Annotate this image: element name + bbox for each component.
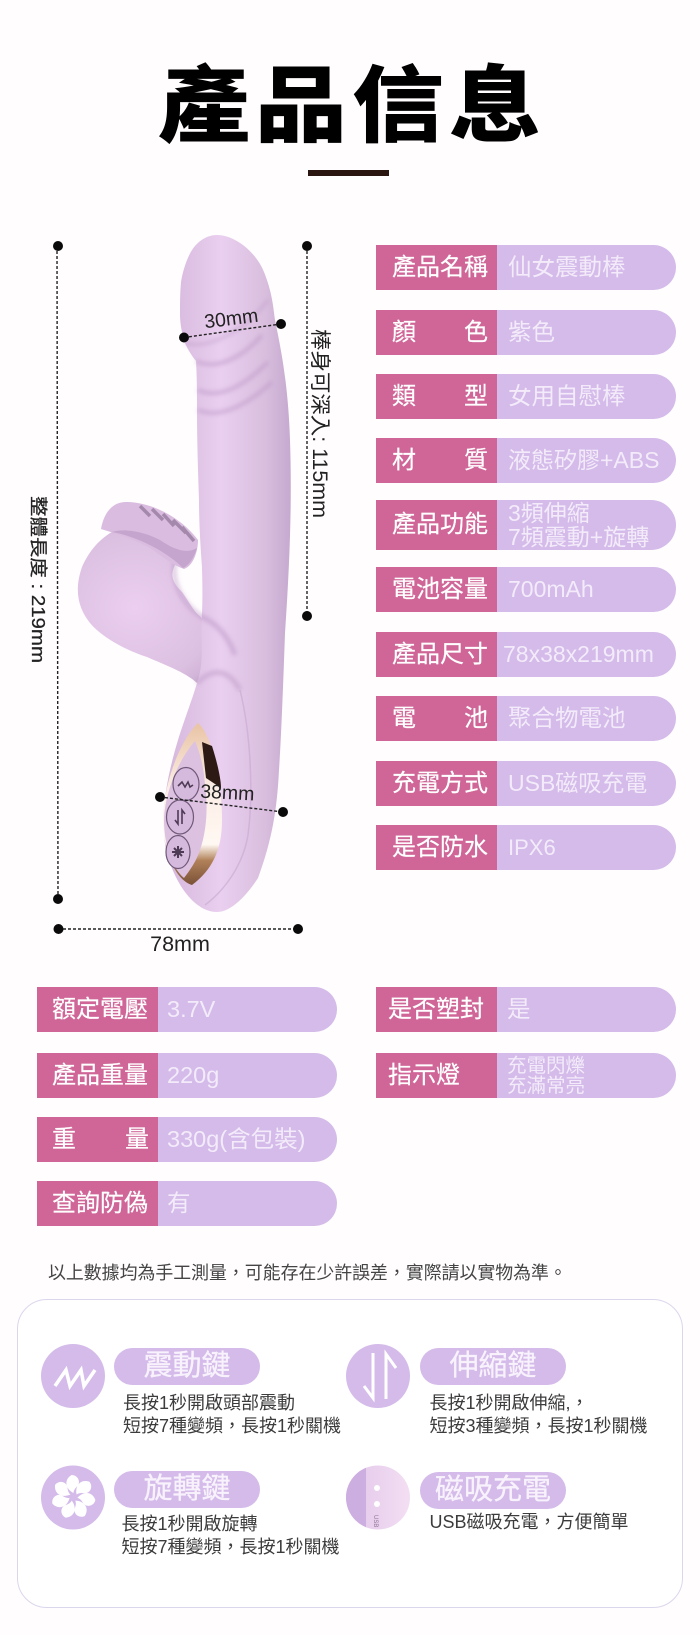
spec row: 產品重量: 220g: [167, 1062, 219, 1088]
icon: magnetic charging: USB: [372, 1515, 378, 1527]
spec row: 電池容量: 電池容量: [392, 576, 488, 602]
spec row: 類型: 女用自慰棒: [508, 383, 626, 409]
text: 伸縮鍵 description: 長按1秒開啟伸縮,，: [430, 1393, 589, 1413]
spec row: 顏色: 紫色: [508, 319, 555, 345]
spec row: 產品功能: [376, 500, 676, 550]
dimension: insertable length: [302, 241, 331, 621]
spec row: 產品尺寸: 產品尺寸: [392, 640, 488, 668]
spec row: 額定電壓: [37, 987, 337, 1032]
dimension: width 78mm: 78mm: [150, 932, 210, 956]
spec row: 電池: 聚合物電池: [508, 705, 626, 731]
spec row: 重量: 重: [52, 1126, 76, 1152]
spec row: 是否防水: 是否防水: [392, 834, 488, 860]
spec row: 產品名稱: 產品名稱: [392, 254, 488, 280]
spec row: 產品功能: 3頻伸縮: [508, 500, 590, 526]
dimension: insertable length: 棒身可深入: 115mm: [308, 329, 331, 518]
disclaimer note: 以上數據均為手工測量，可能存在少許誤差，實際請以實物為準。: [48, 1263, 567, 1283]
heading: 震動鍵: 震動鍵: [143, 1350, 230, 1382]
spec row: 材質: 質: [464, 446, 488, 474]
spec row: 電池: 電: [392, 704, 416, 732]
spec row: 重量: 330g(含包裝): [167, 1126, 305, 1152]
heading: 伸縮鍵: [420, 1348, 566, 1385]
title underline: [308, 170, 389, 176]
spec row: 類型: 類: [392, 382, 416, 410]
spec row: 重量: 量: [125, 1126, 149, 1152]
text: 伸縮鍵 description: 短按3種變頻，長按1秒關機: [430, 1416, 648, 1436]
heading: 磁吸充電: [420, 1472, 566, 1509]
title: 產品信息: [158, 61, 546, 153]
spec row: 類型: 型: [464, 382, 488, 410]
text: 伸縮鍵 description: [430, 1393, 648, 1436]
text: 磁吸充電 description: USB磁吸充電，方便簡單: [430, 1512, 629, 1532]
icon: vibration: [41, 1344, 105, 1408]
spec row: 顏色: [376, 310, 676, 355]
panel: button functions: [17, 1299, 683, 1608]
dimension: total length: [28, 241, 63, 904]
spec row: 額定電壓: 額定電壓: [52, 996, 148, 1022]
text: 震動鍵 description: [123, 1393, 341, 1436]
spec row: 電池容量: 700mAh: [508, 576, 594, 602]
spec row: 電池: [376, 696, 676, 741]
product button panel: [163, 723, 222, 885]
heading: 震動鍵: [114, 1348, 260, 1385]
spec row: 是否塑封: 是否塑封: [388, 996, 484, 1022]
spec row: 類型: [376, 374, 676, 419]
spec row: 查詢防偽: 查詢防偽: [52, 1190, 148, 1216]
spec row: 指示燈: 充滿常亮: [507, 1075, 585, 1097]
spec row: 指示燈: [376, 1053, 676, 1098]
spec row: 重量: [37, 1117, 337, 1162]
product silhouette: [78, 235, 291, 912]
text: 震動鍵 description: 短按7種變頻，長按1秒關機: [123, 1416, 341, 1436]
dimension: handle 38mm: 38mm: [200, 781, 255, 805]
spec row: 顏色: 色: [464, 318, 488, 346]
spec row: 產品重量: [37, 1053, 337, 1098]
text: 旋轉鍵 description: 長按1秒開啟旋轉: [122, 1514, 258, 1534]
spec row: 指示燈: 指示燈: [388, 1062, 460, 1088]
spec row: 材質: 液態矽膠+ABS: [508, 447, 659, 473]
spec row: 額定電壓: 3.7V: [167, 996, 215, 1022]
spec row: 充電方式: [376, 761, 676, 806]
spec row: 查詢防偽: 有: [167, 1190, 190, 1216]
spec row: 產品功能: 7頻震動+旋轉: [508, 524, 649, 550]
spec row: 電池: 池: [464, 704, 488, 732]
spec row: 充電方式: USB磁吸充電: [508, 770, 647, 796]
text: 旋轉鍵 description: [122, 1514, 340, 1556]
dimension: width 78mm: [54, 924, 303, 956]
spec row: 電池容量: [376, 567, 676, 612]
dimension: head 30mm: 30mm: [203, 305, 260, 333]
icon: telescoping arrows: [346, 1344, 410, 1408]
spec row: 查詢防偽: [37, 1181, 337, 1226]
spec row: 材質: [376, 438, 676, 483]
spec row: 是否塑封: [376, 987, 676, 1032]
icon: magnetic charging: [346, 1466, 410, 1530]
product diagram with dimensions: [28, 235, 331, 956]
spec row: 是否防水: IPX6: [508, 834, 556, 860]
heading: 伸縮鍵: 伸縮鍵: [449, 1350, 536, 1382]
heading: 旋轉鍵: [114, 1471, 260, 1508]
product body: [164, 235, 291, 912]
heading: 磁吸充電: 磁吸充電: [435, 1474, 551, 1506]
text: 震動鍵 description: 長按1秒開啟頭部震動: [123, 1393, 295, 1413]
text: 旋轉鍵 description: 短按7種變頻，長按1秒關機: [122, 1536, 340, 1556]
dimension: handle 38mm: [155, 781, 288, 817]
product buttons: [166, 768, 199, 868]
spec row: 充電方式: 充電方式: [392, 770, 488, 796]
spec row: 產品尺寸: [376, 632, 676, 677]
spec row: 材質: 材: [392, 446, 416, 474]
icon: rotation swirl: [41, 1466, 105, 1530]
product shading: [174, 300, 272, 690]
spec row: 產品功能: 產品功能: [392, 511, 488, 538]
spec row: 產品名稱: [376, 245, 676, 290]
spec row: 是否塑封: 是: [507, 996, 530, 1022]
product ring: [101, 502, 198, 569]
spec row: 指示燈: 充電閃爍: [507, 1055, 585, 1077]
spec row: 產品重量: 產品重量: [52, 1062, 148, 1088]
spec row: 產品名稱: 仙女震動棒: [508, 254, 626, 280]
dimension: head 30mm: [179, 305, 286, 342]
heading: 旋轉鍵: 旋轉鍵: [143, 1473, 230, 1505]
product arm: [78, 532, 240, 683]
dimension: total length: 整體長度 : 219mm: [28, 496, 48, 663]
spec row: 顏色: 顏: [392, 318, 416, 346]
spec row: 是否防水: [376, 825, 676, 870]
spec row: 產品尺寸: 78x38x219mm: [503, 641, 654, 667]
